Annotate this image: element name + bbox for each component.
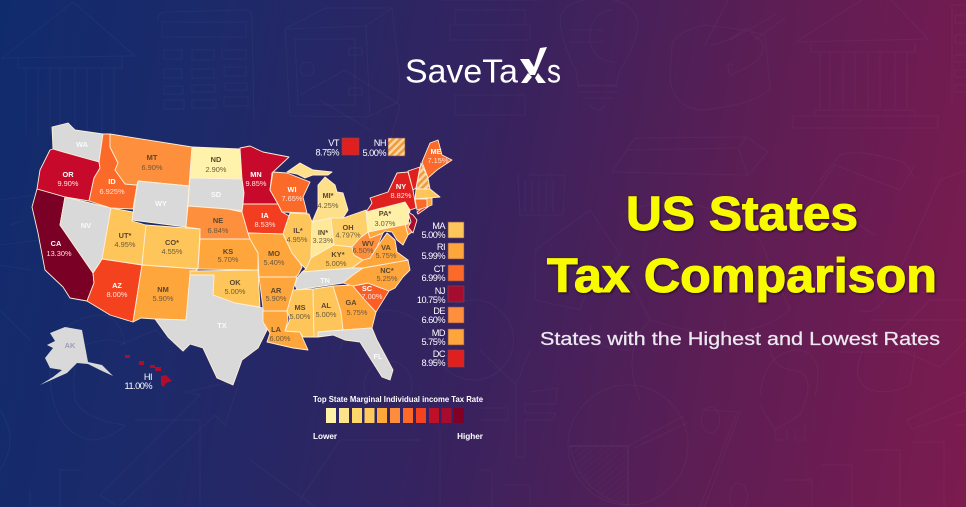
legend: MD [421, 328, 464, 347]
state: WA [52, 123, 103, 162]
legend: CT [421, 264, 464, 283]
state: IL: IL* [293, 226, 303, 235]
title: Tax Comparison [547, 250, 937, 303]
state: PA [366, 202, 410, 232]
state: NE: 6.84% [208, 226, 229, 235]
state: CA: 13.30% [46, 249, 72, 258]
state: TX [155, 275, 267, 385]
state: SD [188, 178, 244, 211]
state: GA [333, 285, 376, 330]
state: MD [368, 224, 408, 245]
legend: CT: 6.99% [421, 273, 445, 283]
state: TN [295, 268, 363, 290]
state: WI [270, 172, 310, 213]
state: CA [32, 189, 94, 301]
state: WV: WV [362, 239, 374, 248]
state: MS: 5.00% [290, 312, 311, 321]
state: SD: SD [211, 190, 222, 199]
state: KS: 5.70% [218, 255, 239, 264]
legend: RI: 5.99% [421, 251, 445, 261]
state: UT: UT* [119, 231, 131, 240]
state: ID: 6.925% [99, 187, 125, 196]
state: OK [190, 270, 260, 307]
state: AL [313, 286, 343, 337]
state: IA [242, 204, 289, 234]
state: HI: 11.00% [125, 381, 152, 391]
state: CO [142, 225, 200, 269]
colour scale legend: Top State Marginal Individual income Tax Rate [313, 395, 483, 404]
state: CT [415, 199, 427, 210]
state: NC: NC* [380, 266, 394, 275]
legend: NJ [417, 286, 464, 305]
state: NC [343, 260, 410, 291]
legend: CT: CT [434, 264, 446, 274]
state: OR [37, 149, 100, 201]
state: AK [40, 327, 113, 385]
legend: MA: MA [432, 221, 446, 231]
state: ID: ID [108, 177, 116, 186]
legend: DE: DE [433, 306, 445, 316]
legend: DE: 6.60% [421, 315, 445, 325]
state: ID [89, 134, 137, 209]
state: WA: WA [76, 140, 89, 149]
state: RI [427, 198, 432, 207]
logo: SaveTaxs [405, 47, 561, 90]
state: ME: ME [430, 147, 442, 156]
state: OH: OH [342, 223, 354, 232]
state: MN: MN [250, 170, 262, 179]
state: UT [102, 208, 146, 265]
state: AL: AL [321, 301, 331, 310]
state: VA [352, 233, 408, 268]
legend: NJ: 10.75% [417, 295, 445, 305]
logo: SaveTaxs: SaveTa [405, 54, 518, 90]
legend: MA: 5.00% [421, 230, 445, 240]
state: ME: 7.15% [428, 156, 449, 165]
state: SC: SC [362, 284, 373, 293]
state: AR [259, 277, 297, 311]
legend: DC [421, 349, 464, 368]
legend: RI [421, 242, 464, 261]
legend: VT [315, 138, 359, 158]
legend: DC: DC [433, 349, 446, 359]
state: SC: 7.00% [362, 292, 383, 301]
state: NC: 5.25% [377, 274, 398, 283]
state: NY: 8.82% [391, 191, 412, 200]
state: NV [60, 197, 111, 273]
state: NY: NY [396, 182, 406, 191]
state: MS [285, 289, 314, 337]
title: US States [626, 188, 858, 241]
legend: DE [421, 306, 464, 325]
legend: VT: VT [328, 138, 340, 148]
state: KY: 5.00% [326, 259, 347, 268]
legend: NH: 5.00% [362, 148, 386, 158]
legend: MA [421, 221, 464, 240]
state: MI: 4.25% [318, 201, 339, 210]
state: KS [198, 239, 258, 270]
state: IA: 8.53% [255, 220, 276, 229]
state: MS: MS [294, 303, 306, 312]
state: ME [422, 140, 452, 178]
state: WI: 7.65% [282, 194, 303, 203]
state: CA: CA [51, 239, 62, 248]
state: TN: TN [320, 276, 330, 285]
state: AZ [87, 259, 142, 322]
state: GA: 5.75% [347, 308, 368, 317]
state: NE: NE [213, 216, 223, 225]
state: OK: OK [229, 278, 241, 287]
state: GA: GA [345, 298, 357, 307]
state: LA: 6.00% [270, 334, 291, 343]
state: MA [415, 189, 440, 199]
state: OR: OR [62, 170, 74, 179]
state: MO [248, 233, 302, 277]
state: IA: IA [261, 211, 269, 220]
state: KY: KY* [331, 250, 345, 259]
state: UT: 4.95% [115, 240, 136, 249]
legend: NJ: NJ [435, 286, 445, 296]
state: KS: KS [223, 247, 233, 256]
state: LA: LA [271, 325, 282, 334]
state: ND: 2.90% [206, 165, 227, 174]
state: ND [190, 147, 242, 179]
state: VA: VA [381, 243, 392, 252]
state: NJ [408, 212, 417, 233]
state: MI [287, 163, 348, 222]
state: TX: TX [217, 321, 227, 330]
state: MT: 6.90% [142, 163, 163, 172]
state: NM: 5.90% [153, 294, 174, 303]
state: HI [125, 355, 172, 391]
state: IN: 3.23% [313, 236, 334, 245]
state: FL [318, 328, 393, 380]
state: CO: CO* [165, 238, 179, 247]
legend: DC: 8.95% [421, 358, 445, 368]
legend: NH: NH [374, 138, 386, 148]
legend: NH [362, 138, 405, 158]
state: LA [263, 311, 308, 350]
state: AR: AR [271, 286, 282, 295]
state: NV: NV [81, 221, 91, 230]
state: IN [311, 218, 334, 258]
colour scale legend: Higher [457, 432, 484, 441]
logo: SaveTaxs: s [547, 54, 561, 90]
state: FL: FL [373, 352, 383, 361]
state: WI: WI [287, 185, 297, 194]
state: WY: WY [155, 199, 167, 208]
state: OR: 9.90% [58, 179, 79, 188]
state: AZ: 8.00% [107, 290, 128, 299]
state: MT [110, 134, 192, 186]
state: SC [353, 283, 389, 312]
colour scale legend: Lower [313, 432, 338, 441]
state: MN [240, 146, 289, 204]
legend: MD: 5.75% [421, 337, 445, 347]
state: OK: 5.00% [225, 287, 246, 296]
state: MI: MI* [322, 191, 334, 200]
state: WY [132, 181, 189, 227]
state: ND: ND [211, 155, 222, 164]
title [547, 188, 937, 303]
legend: MD: MD [432, 328, 446, 338]
state: PA: 3.07% [375, 219, 396, 228]
state: HI: HI [144, 372, 152, 382]
state: MO: MO [268, 249, 280, 258]
state: KY [302, 245, 363, 272]
colour scale legend [313, 395, 484, 441]
state: AR: 5.90% [266, 294, 287, 303]
state: NM: NM [157, 285, 169, 294]
state: CO: 4.55% [162, 247, 183, 256]
state: DE [405, 222, 412, 235]
state: NH [416, 163, 430, 189]
state: AZ: AZ [112, 281, 122, 290]
US map [32, 123, 452, 391]
state: NY [366, 172, 428, 214]
state: IN: IN* [318, 228, 328, 237]
state: AK: AK [65, 341, 76, 350]
state: NE [186, 206, 250, 239]
state: MN: 9.85% [246, 179, 267, 188]
state: MT: MT [147, 153, 158, 162]
state: VA: 5.75% [376, 251, 397, 260]
state: AL: 5.00% [316, 310, 337, 319]
state: IL: 4.95% [287, 235, 308, 244]
state: WV [352, 232, 383, 260]
subtitle: States with the Highest and Lowest Rates [540, 329, 940, 349]
state: VT [408, 167, 420, 190]
state: PA: PA* [379, 209, 391, 218]
state: MO: 5.40% [264, 258, 285, 267]
state: IL [283, 213, 312, 269]
state: NM [133, 265, 198, 322]
legend: RI: RI [437, 242, 445, 252]
state: WV: 6.50% [353, 246, 374, 255]
state: OH: 4.797% [335, 230, 361, 240]
state: OH [331, 210, 368, 247]
legend: VT: 8.75% [315, 148, 339, 158]
